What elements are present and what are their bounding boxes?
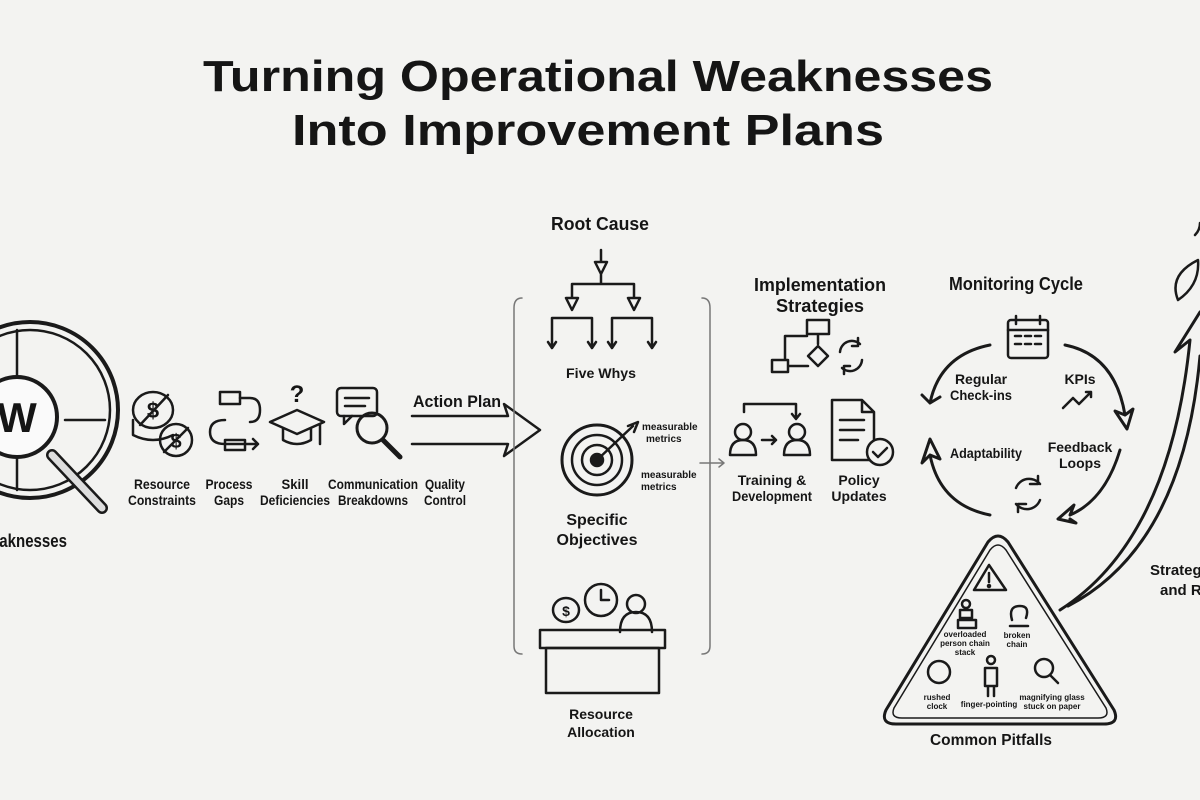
panel: common pitfalls triangle: person chain [940,639,990,648]
implementation strategies [754,275,886,374]
monitoring cycle: KPIs [1064,371,1096,387]
monitoring cycle: Loops [1059,455,1101,471]
label: resource allocation: Allocation [567,724,635,740]
monitoring cycle: Adaptability [950,445,1022,461]
panel: common pitfalls triangle: overloaded [944,630,986,639]
icon: policy updates: Policy [838,472,880,488]
bracket: action plan group [514,298,710,654]
icon: policy updates [831,400,893,504]
icon: skill deficiencies: ? [290,381,304,408]
panel: common pitfalls triangle: rushed [924,693,950,702]
icon: training & development: Training & [738,472,806,488]
monitoring cycle: Monitoring Cycle [949,274,1083,294]
icon: resource constraints [133,392,192,456]
panel: common pitfalls triangle: finger-pointing [961,700,1017,709]
root cause tree [548,214,656,381]
title [203,52,993,155]
monitoring cycle: Feedback [1048,439,1113,455]
category labels: Deficiencies [260,492,330,508]
panel: common pitfalls triangle [884,536,1116,724]
title: Into Improvement Plans [292,106,884,155]
target: specific objectives: measurable [641,470,697,481]
implementation strategies: Implementation [754,275,886,295]
implementation strategies: Strategies [776,296,864,316]
icon: skill deficiencies [270,381,324,444]
target: specific objectives: metrics [646,434,682,445]
target: specific objectives: metrics [641,482,677,493]
monitoring cycle: Check-ins [950,387,1012,403]
category labels: Resource [134,476,190,492]
category labels: Skill [282,476,308,492]
monitoring cycle [922,274,1133,523]
panel: common pitfalls triangle: magnifying glass [1019,693,1085,702]
icon: communication breakdowns [337,388,400,457]
root cause tree: Five Whys [566,365,636,381]
big arrow: strategy [1060,223,1200,610]
icon: process gaps [210,392,260,450]
icon: resource constraints: $ [170,431,182,453]
category labels: Constraints [128,492,196,508]
category labels: Breakdowns [338,492,408,508]
category labels: Gaps [214,492,244,508]
panel: common pitfalls triangle: stack [955,648,976,657]
target: specific objectives: measurable [642,422,698,433]
category labels [128,476,466,508]
category labels: Quality [425,476,465,492]
panel: common pitfalls triangle: stuck on paper [1024,702,1080,711]
panel: common pitfalls triangle: chain [1007,640,1028,649]
icon: policy updates: Updates [831,488,887,504]
category labels: Communication [328,476,418,492]
title: Turning Operational Weaknesses [203,52,993,101]
arrow to training [700,459,724,467]
panel: common pitfalls triangle: broken [1004,631,1030,640]
icon: training & development: Development [732,488,812,504]
category labels: Process [206,476,253,492]
label: common pitfalls: Common Pitfalls [930,732,1052,749]
icon: resource allocation toolbox: $ [562,603,570,619]
root cause tree: Root Cause [551,214,649,234]
icon: resource constraints: $ [147,398,159,423]
monitoring cycle: Regular [955,371,1008,387]
target: specific objectives: Objectives [557,532,638,549]
icon: resource allocation toolbox [540,584,665,693]
text: Resource [569,706,633,722]
arrow: action plan: Action Plan [413,392,501,411]
category labels: Control [424,492,466,508]
target: specific objectives [557,422,698,549]
panel: common pitfalls triangle: clock [927,702,948,711]
arrow: action plan [412,392,540,456]
icon: training & development [730,404,812,504]
target: specific objectives: Specific [566,512,628,529]
icon: weaknesses magnifier [0,322,118,508]
